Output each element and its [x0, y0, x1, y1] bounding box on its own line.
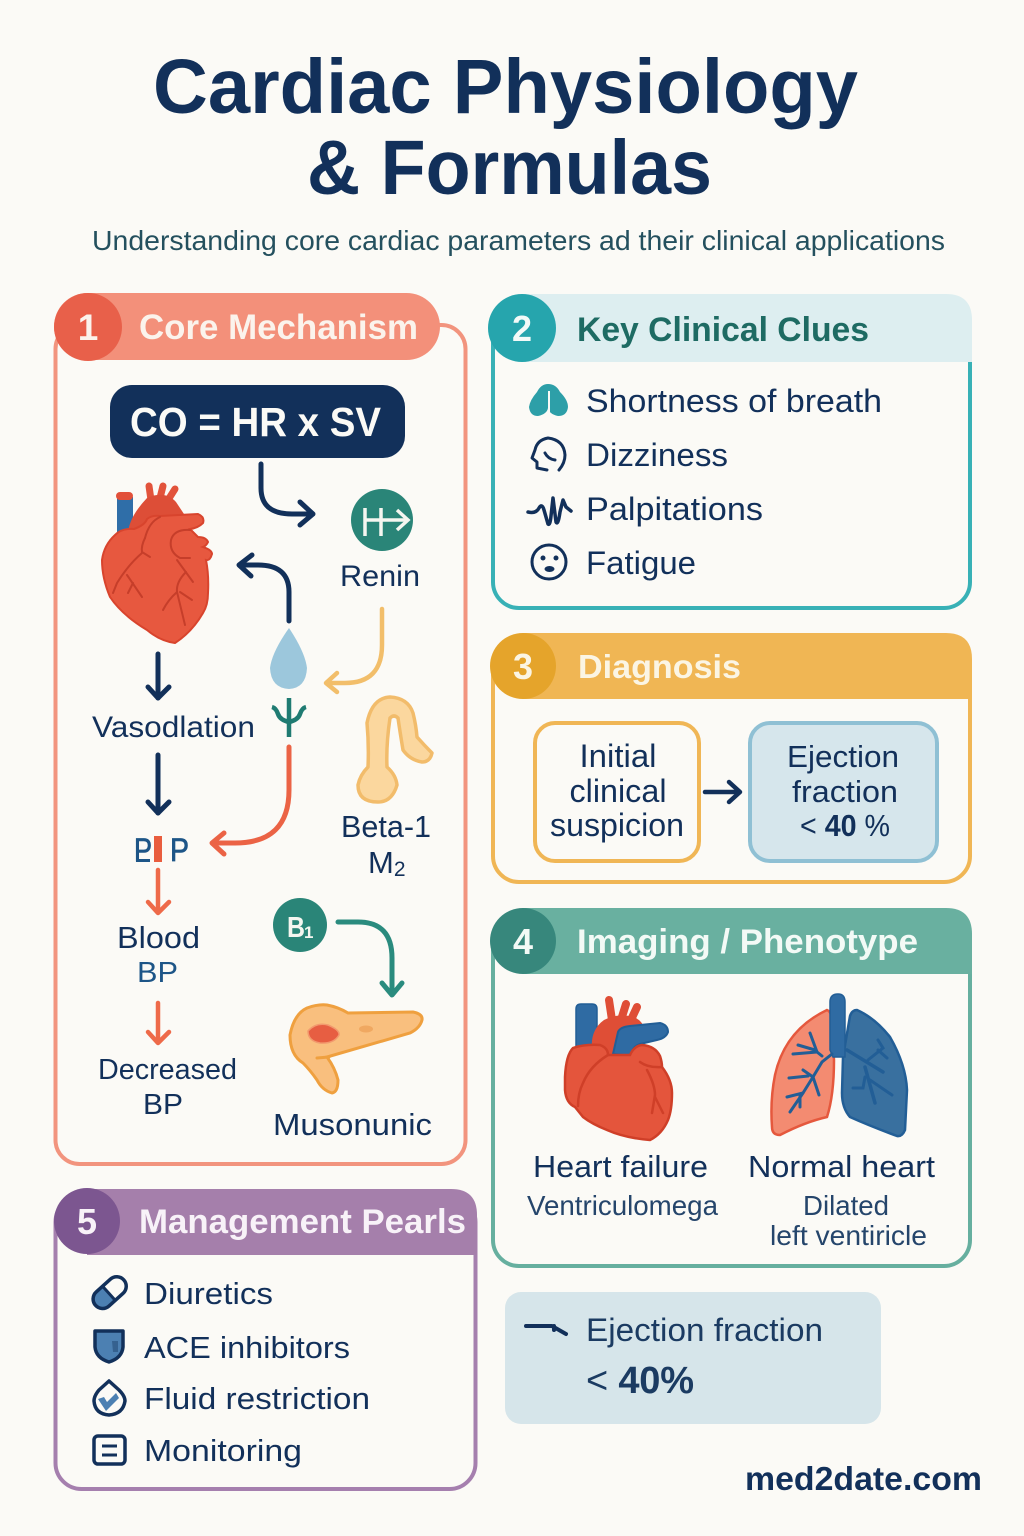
- panel: diagnosis: [490, 633, 972, 882]
- text: diuretics: Diuretics: [144, 1276, 273, 1311]
- icon: fluid drop check: [94, 1381, 125, 1415]
- icon: beta-1 tube: [358, 697, 432, 802]
- label: PIP: P: [170, 832, 189, 868]
- header: core mechanism: 1: [78, 307, 98, 348]
- formula box: [110, 385, 405, 458]
- label: normal heart: Dilated: [803, 1190, 889, 1221]
- text: fluid restriction: Fluid restriction: [144, 1381, 370, 1416]
- text: shortness of breath: Shortness of breath: [586, 383, 882, 419]
- label: beta-1 M2: 2: [394, 858, 406, 881]
- box: ejection fraction: Ejection: [787, 739, 899, 774]
- icon: monitor: [94, 1436, 125, 1464]
- panel: imaging / phenotype: [490, 908, 972, 1266]
- text: ACE inhibitors: ACE inhibitors: [144, 1330, 350, 1365]
- icon: shield: [95, 1331, 123, 1362]
- icon: lungs: [529, 384, 568, 416]
- arrow: formula to renin: [261, 464, 313, 525]
- title: Cardiac Physiology: [153, 44, 858, 130]
- label: beta-1 M2: M: [368, 845, 394, 880]
- callout: ejection fraction: Ejection fraction: [586, 1312, 823, 1348]
- panel: management pearls: [54, 1188, 477, 1489]
- callout: ejection fraction: < 40%: [586, 1360, 694, 1402]
- label: decreased BP: [98, 1054, 237, 1121]
- text: palpitations: Palpitations: [586, 491, 763, 527]
- header: imaging / phenotype: [490, 908, 972, 974]
- text: dizziness: Dizziness: [586, 437, 728, 473]
- icon: capsule: [89, 1273, 130, 1312]
- box: ejection fraction: < 40 %: [800, 808, 890, 843]
- icon: lungs: [771, 994, 907, 1136]
- icon: callout arrow: [526, 1326, 566, 1334]
- label: decreased BP: BP: [143, 1089, 183, 1121]
- header: management pearls: Management Pearls: [139, 1203, 466, 1241]
- header: key clinical clues: 2: [512, 308, 532, 349]
- header: imaging / phenotype: Imaging / Phenotype: [577, 923, 918, 961]
- label: decreased BP: Decreased: [98, 1054, 237, 1086]
- arrow: renin to droplet: [326, 609, 382, 692]
- label: blood BP: BP: [137, 957, 178, 989]
- arrow: B1 to organ: [338, 922, 402, 995]
- icon: renin circle: [351, 489, 413, 551]
- label: blood BP: Blood: [117, 920, 200, 955]
- arrow: heart down: [148, 654, 169, 698]
- arrow: diagnosis: [705, 782, 740, 802]
- icon: dizziness head: [532, 438, 565, 470]
- brand: med2date.com: med2date.com: [745, 1460, 982, 1497]
- icon: pancreas organ: [290, 1005, 422, 1093]
- title: & Formulas: [307, 125, 712, 211]
- icon: teal receptor: [272, 698, 306, 737]
- icon: B1 circle: 1: [304, 923, 313, 942]
- label: blood BP: [117, 920, 200, 989]
- callout: ejection fraction: [505, 1292, 881, 1424]
- icon: palpitations waveform: [528, 498, 571, 524]
- box: initial clinical suspicion: Initial: [580, 738, 656, 774]
- icon: fatigue face: [532, 545, 566, 579]
- text: fatigue: Fatigue: [586, 545, 696, 581]
- label: normal heart: left ventiricle: [770, 1220, 927, 1251]
- label: PIP: [134, 832, 189, 868]
- panel: core mechanism: [54, 293, 466, 1164]
- label: normal heart: [748, 1149, 935, 1251]
- panel: key clinical clues: [488, 294, 972, 608]
- box: ejection fraction: [750, 723, 937, 861]
- header: key clinical clues: Key Clinical Clues: [577, 311, 869, 349]
- box: initial clinical suspicion: [535, 723, 699, 861]
- box: initial clinical suspicion: clinical: [570, 773, 666, 809]
- icon: failing heart: [565, 1000, 672, 1140]
- label: heart failure: [527, 1149, 718, 1221]
- arrow: to PIP: [212, 747, 289, 854]
- icon: B1 circle: [273, 898, 327, 952]
- label: renin: Renin: [340, 560, 420, 593]
- header: key clinical clues: [488, 294, 972, 362]
- box: initial clinical suspicion: suspicion: [550, 807, 684, 843]
- header: core mechanism: Core Mechanism: [139, 308, 418, 347]
- icon: heart: [102, 486, 212, 643]
- header: management pearls: [54, 1188, 477, 1255]
- label: heart failure: Ventriculomega: [527, 1190, 718, 1221]
- arrow: vasodilation down: [148, 755, 169, 813]
- header: core mechanism: [54, 293, 440, 361]
- label: normal heart: Normal heart: [748, 1149, 935, 1184]
- arrow: blood down: [148, 1003, 169, 1043]
- title: [153, 44, 858, 211]
- header: diagnosis: Diagnosis: [578, 648, 741, 685]
- header: imaging / phenotype: 4: [513, 921, 533, 962]
- header: diagnosis: 3: [513, 646, 533, 687]
- header: diagnosis: [490, 633, 972, 699]
- label: PIP: P: [134, 832, 152, 868]
- formula box: CO = HR x SV: [130, 399, 382, 445]
- arrow: PIP down: [148, 870, 169, 913]
- label: heart failure: Heart failure: [533, 1149, 708, 1184]
- label: musonunic: Musonunic: [273, 1107, 432, 1142]
- icon: droplet: [270, 628, 307, 689]
- arrow: to heart: [239, 555, 289, 621]
- label: vasodilation: Vasodlation: [92, 711, 255, 744]
- header: management pearls: 5: [77, 1201, 97, 1242]
- text: monitoring: Monitoring: [144, 1433, 302, 1468]
- subtitle: Understanding core cardiac parameters ad their clinical applications: [92, 225, 945, 256]
- label: beta-1 M2: Beta-1: [341, 809, 431, 844]
- box: ejection fraction: fraction: [792, 774, 898, 809]
- icon: B1 circle: B: [287, 912, 305, 944]
- label: beta-1 M2: [341, 809, 431, 881]
